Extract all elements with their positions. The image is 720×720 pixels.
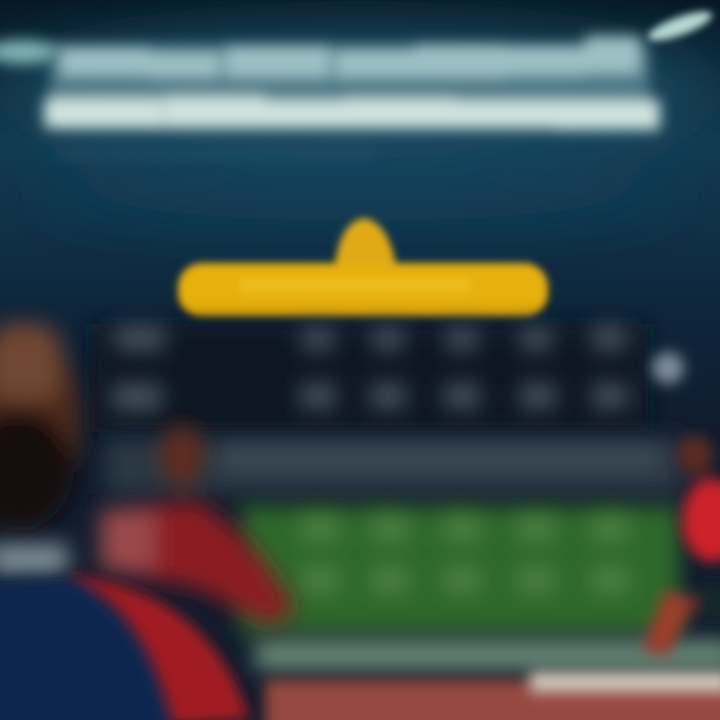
figure: right player in red: [642, 435, 720, 655]
title faint subtitle: [55, 150, 375, 158]
track band: [255, 640, 720, 670]
red foreground barrier: [265, 672, 720, 720]
spectator head: [0, 320, 80, 530]
scoreboard table: [92, 324, 685, 494]
light streak: top left: [0, 40, 58, 64]
figure: mid-left player in red: [100, 426, 295, 625]
spectator collar: [0, 544, 68, 574]
figure: foreground spectator: [0, 320, 250, 720]
title line two: [44, 96, 660, 130]
table body: [92, 324, 648, 432]
spectator navy jacket: [0, 578, 175, 720]
yellow banner with rounded crest: [178, 218, 548, 317]
floodlight blob at right of table: [652, 352, 684, 384]
spectator red shoulder: [70, 575, 250, 720]
football pitch: [240, 506, 680, 634]
table cell values: [112, 326, 660, 468]
stadium glow behind title: [0, 20, 720, 220]
white highlight: [530, 672, 720, 692]
title line one: [60, 36, 640, 78]
pitch surface: [240, 506, 680, 634]
light streak: top right: [645, 6, 715, 46]
grey table row: [105, 438, 685, 494]
title: blurred illegible headline: [44, 36, 660, 158]
title underlay band: [50, 44, 650, 130]
pitch cell values: [302, 518, 628, 592]
